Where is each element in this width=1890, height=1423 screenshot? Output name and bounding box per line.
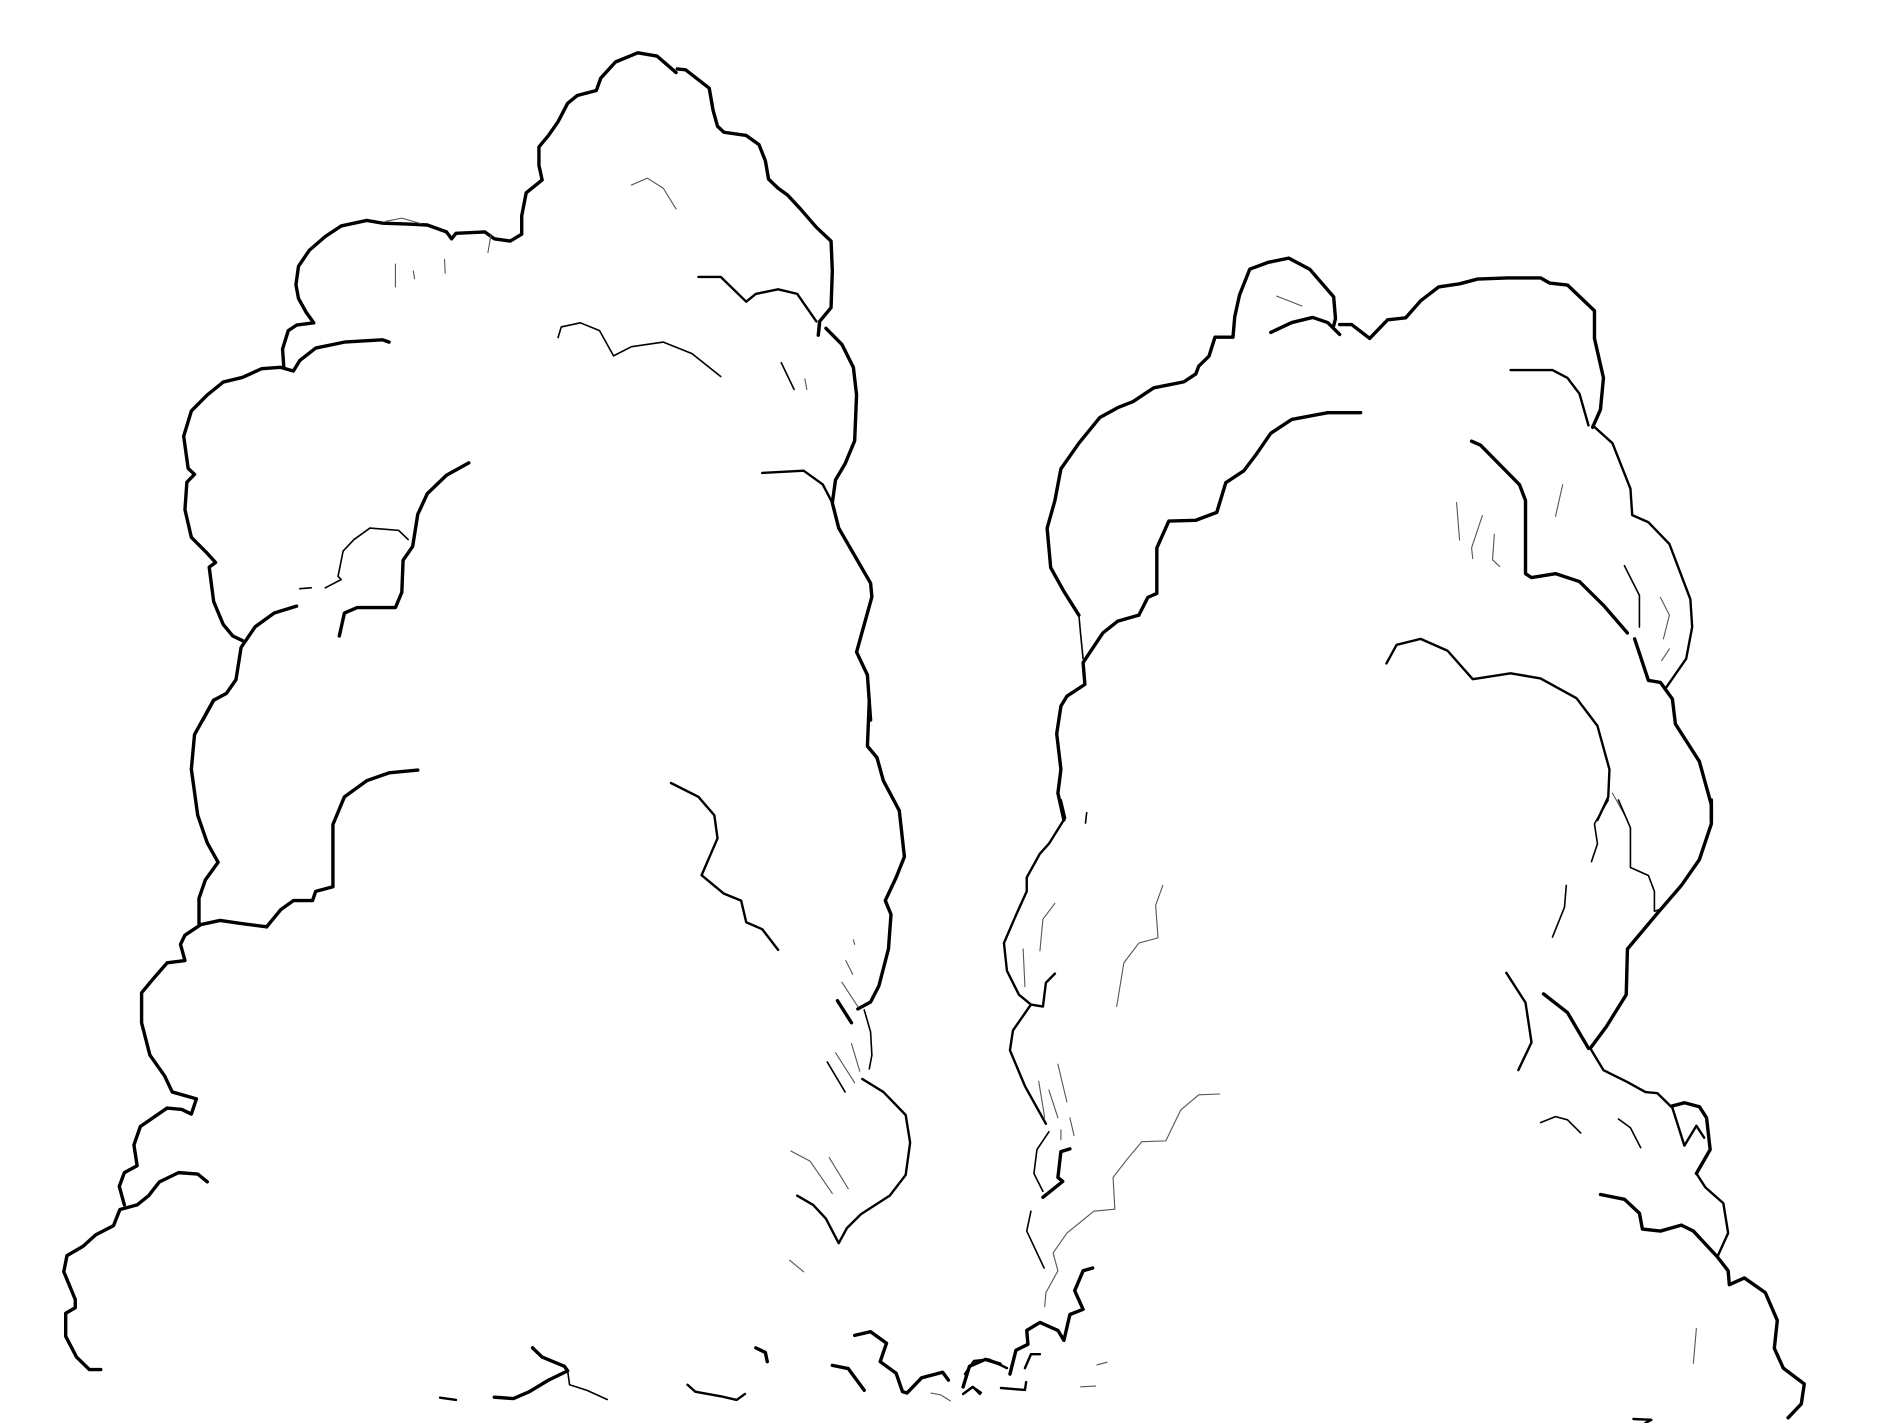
right cloud: lower outline and billows (963, 800, 1804, 1423)
left cloud: upper outline and billows (184, 53, 872, 720)
right cloud: upper outline and billows (1047, 258, 1711, 820)
right cloud (963, 258, 1804, 1423)
left cloud: lower outline and billows (64, 700, 1000, 1401)
left cloud (64, 53, 1000, 1401)
